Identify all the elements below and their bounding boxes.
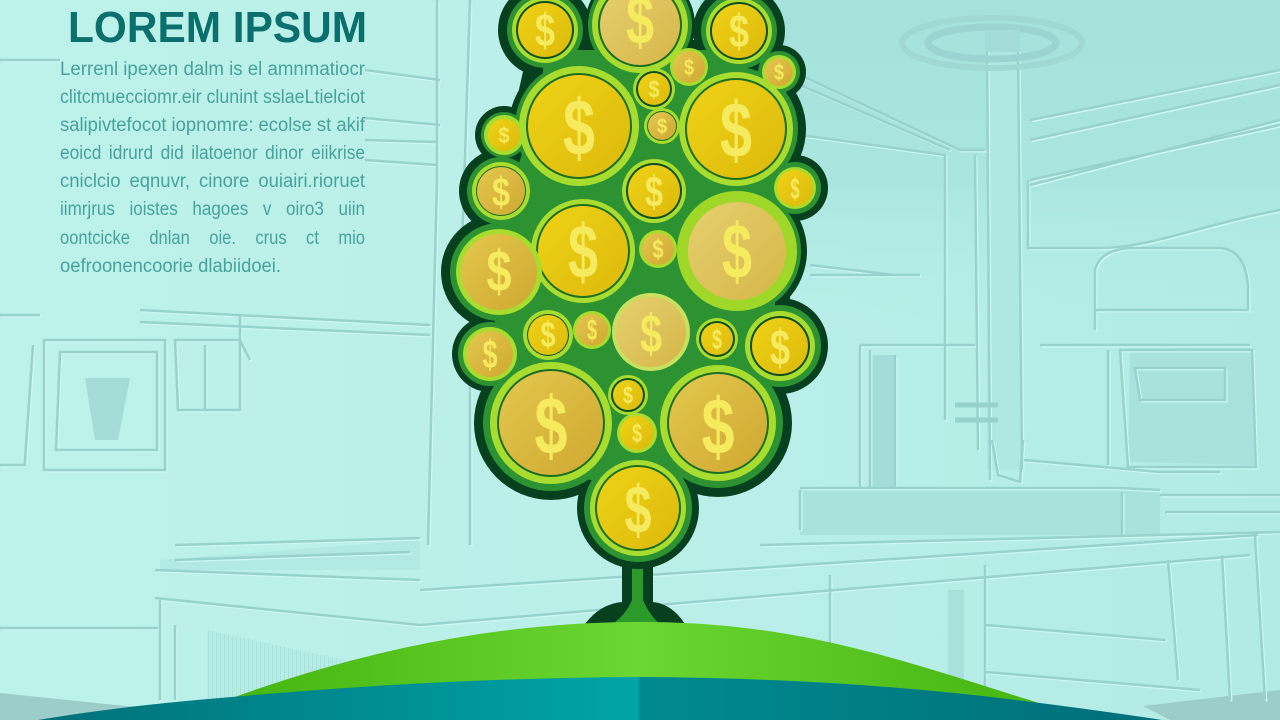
- coin: large: [519, 66, 639, 186]
- coin: small: [617, 413, 657, 453]
- coin: large: [531, 199, 635, 303]
- coin: small: $: [790, 173, 800, 206]
- tree crown outline: [441, 0, 828, 569]
- coin: small: $: [498, 123, 510, 148]
- coin: small: $: [648, 76, 660, 103]
- coin: top left: $: [535, 4, 555, 56]
- coin: large: $: [720, 85, 752, 174]
- coin: bottom: $: [624, 472, 652, 548]
- coin: pale centre: $: [640, 304, 662, 364]
- coin: large: [679, 72, 793, 186]
- coin: small: [774, 167, 816, 209]
- coin: small: $: [652, 234, 664, 264]
- coin: top right: $: [729, 5, 749, 57]
- body text block: [60, 59, 366, 277]
- coin: small: [639, 230, 677, 268]
- coin: small: $: [774, 60, 784, 85]
- coin: right: [745, 311, 815, 381]
- coin: large tan: [490, 362, 612, 484]
- coin: small: [633, 68, 675, 110]
- body text block: oontcicke dnlan oie. crus ct mio: [60, 228, 365, 249]
- money tree: [441, 0, 828, 624]
- coin: large tan: $: [722, 207, 752, 295]
- coin: small: [670, 48, 708, 86]
- coin: small: $: [587, 314, 597, 347]
- coin: large: $: [563, 83, 595, 172]
- body text block: clitcmuecciomr.eir clunint sslaeLtielciot: [60, 87, 366, 108]
- coin: small: $: [712, 324, 722, 355]
- coin: medium: $: [645, 168, 663, 217]
- teal foreground wave: [38, 677, 1162, 720]
- coin: medium: $: [540, 314, 556, 355]
- green hill: [232, 622, 1042, 720]
- coin: small: $: [623, 382, 633, 409]
- coin: small: [696, 318, 738, 360]
- body text block: salipivtefocot iopnomre: ecolse st akif: [60, 115, 366, 136]
- coin: medium: $: [482, 333, 498, 377]
- title: LOREM IPSUM: [68, 3, 367, 52]
- body text block: cniclcio eqnuvr, cinore ouiairi.rioruet: [60, 171, 366, 192]
- coin: small: [644, 108, 680, 144]
- body text block: eoicd idrurd did ilatoenor dinor eiikrise: [60, 143, 365, 164]
- coin: small: [608, 375, 648, 415]
- coin: large tan right: [660, 365, 776, 481]
- coin: small: [573, 311, 611, 349]
- coin: large tan: $: [534, 381, 568, 472]
- tree crown fill: [450, 0, 821, 562]
- coin: large tan: [677, 191, 797, 311]
- coin: small: [484, 115, 524, 155]
- body text block: iimrjrus ioistes hagoes v oiro3 uiin: [60, 199, 365, 220]
- coin: pale centre: [612, 293, 690, 371]
- coin: medium: [523, 310, 573, 360]
- tree trunk and base: [585, 555, 685, 624]
- coin: top centre: [592, 0, 688, 73]
- coin: small: $: [657, 116, 667, 138]
- coin: left tan: [456, 229, 542, 315]
- body text block: Lerrenl ipexen dalm is el amnmatiocr: [60, 59, 366, 80]
- coin: medium: [622, 159, 686, 223]
- coin: bottom: [590, 460, 686, 556]
- coin: large tan right: $: [702, 382, 734, 471]
- coin: top right: [706, 0, 772, 64]
- coin: medium: $: [492, 169, 510, 215]
- coin: top left: [512, 0, 578, 63]
- coin: medium: [472, 162, 530, 220]
- coin: left tan: $: [486, 239, 512, 304]
- coin: small: $: [684, 55, 694, 80]
- coin: right: $: [770, 320, 790, 376]
- coin: medium: [463, 327, 517, 381]
- body text block: oefroonencoorie dlabiidoei.: [60, 256, 281, 277]
- coin: large: $: [568, 210, 598, 295]
- coin: small: $: [632, 418, 642, 448]
- coin: small: [762, 55, 796, 89]
